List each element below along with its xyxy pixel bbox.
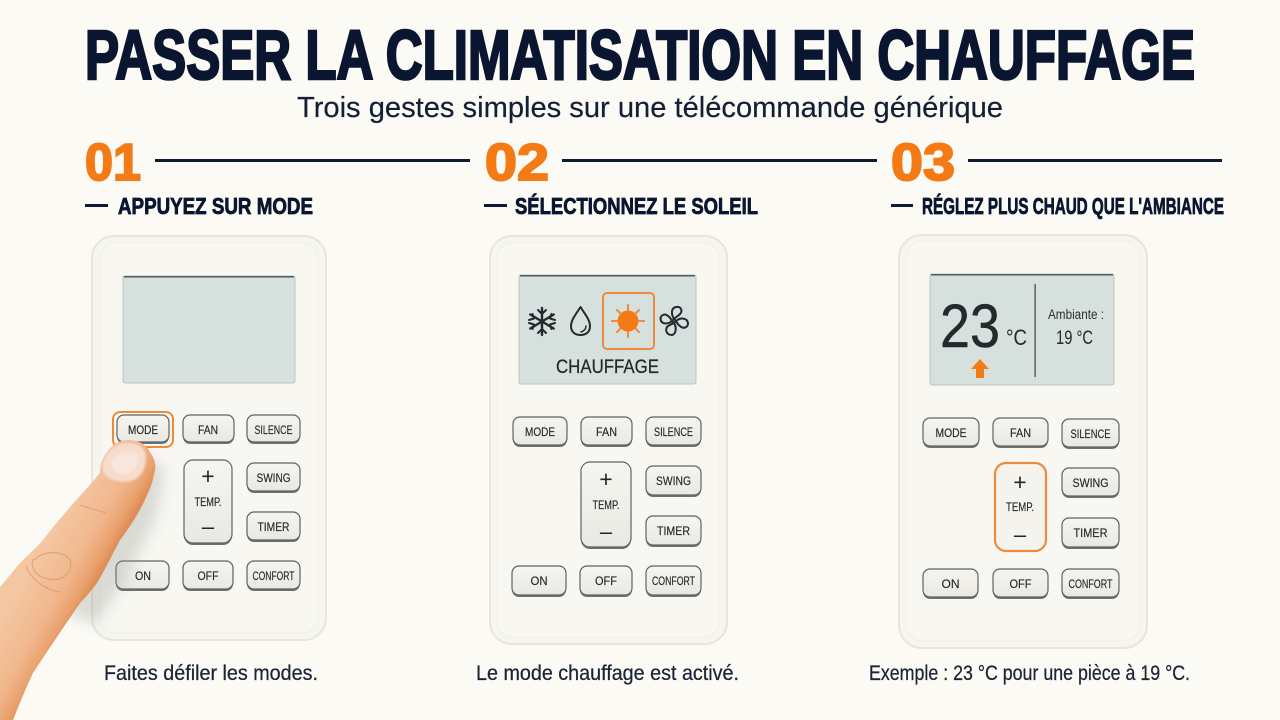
- knuckle wrinkles: [26, 505, 106, 592]
- buttons: CONFORT: [252, 569, 295, 583]
- remote 3: [899, 235, 1147, 648]
- buttons: ON: [135, 569, 151, 583]
- buttons: SILENCE: [654, 425, 693, 439]
- buttons: OFF: [595, 574, 617, 588]
- icon: sun selected: [603, 293, 654, 349]
- buttons: SWING: [1072, 476, 1108, 490]
- buttons: ON: [530, 574, 548, 588]
- screen: [123, 276, 295, 383]
- remote 3: °C: [1006, 325, 1027, 350]
- buttons: FAN: [596, 425, 617, 439]
- buttons: CONFORT: [1068, 577, 1113, 591]
- buttons: –: [600, 519, 613, 544]
- buttons: FAN: [198, 423, 218, 437]
- screen: [519, 275, 696, 384]
- icon: snowflake: [529, 308, 555, 335]
- step 2 header: [484, 134, 877, 219]
- icon: up arrow: [971, 359, 989, 378]
- buttons: SILENCE: [254, 423, 292, 437]
- buttons: +: [599, 466, 613, 492]
- buttons: +: [201, 463, 215, 489]
- buttons: OFF: [1010, 577, 1032, 591]
- buttons: MODE: [128, 423, 158, 437]
- step 3 header: [891, 134, 1224, 219]
- caption 1: Faites défiler les modes.: [104, 662, 318, 685]
- step 2 header: SÉLECTIONNEZ LE SOLEIL: [515, 192, 758, 219]
- screen: [930, 274, 1114, 385]
- buttons: SILENCE: [1070, 427, 1110, 441]
- buttons: TEMP.: [592, 498, 620, 512]
- buttons: +: [1013, 469, 1027, 495]
- step 1 header: 01: [85, 134, 141, 192]
- set temperature: 23: [940, 292, 1000, 360]
- remote 1: [92, 236, 326, 640]
- fingernail: [102, 443, 146, 482]
- step 2 header: 02: [485, 134, 549, 192]
- buttons: [512, 417, 701, 597]
- icon: water drop: [571, 307, 590, 335]
- screen label: CHAUFFAGE: [556, 357, 659, 378]
- buttons: TEMP.: [1006, 500, 1034, 514]
- buttons: OFF: [198, 569, 218, 583]
- buttons: SWING: [256, 471, 290, 485]
- buttons: ON: [942, 577, 960, 591]
- buttons: FAN: [1010, 426, 1031, 440]
- ambient temperature: Ambiante :: [1048, 307, 1104, 322]
- buttons: TEMP.: [194, 495, 222, 509]
- buttons: TIMER: [1074, 526, 1108, 540]
- buttons: TIMER: [657, 524, 690, 538]
- buttons: MODE: [525, 425, 555, 439]
- remote 2: [490, 236, 727, 644]
- subtitle: Trois gestes simples sur une télécommande générique: [297, 92, 1003, 124]
- buttons: MODE: [936, 426, 966, 440]
- remote 3: 19 °C: [1056, 328, 1093, 349]
- buttons: TIMER: [258, 520, 290, 534]
- step 1 header: [85, 134, 470, 219]
- buttons: CONFORT: [652, 574, 695, 588]
- step 3 header: 03: [891, 134, 955, 192]
- buttons: SWING: [656, 474, 691, 488]
- buttons: –: [1014, 522, 1027, 547]
- caption 3: Exemple : 23 °C pour une pièce à 19 °C.: [869, 662, 1190, 685]
- mode highlight: [113, 412, 173, 447]
- caption 2: Le mode chauffage est activé.: [476, 662, 739, 685]
- step 1 header: APPUYEZ SUR MODE: [118, 193, 313, 219]
- icon: fan: [660, 307, 688, 335]
- buttons: –: [202, 514, 215, 539]
- icon: finger pressing mode: [0, 440, 165, 720]
- buttons: [116, 415, 300, 591]
- buttons: [923, 418, 1119, 599]
